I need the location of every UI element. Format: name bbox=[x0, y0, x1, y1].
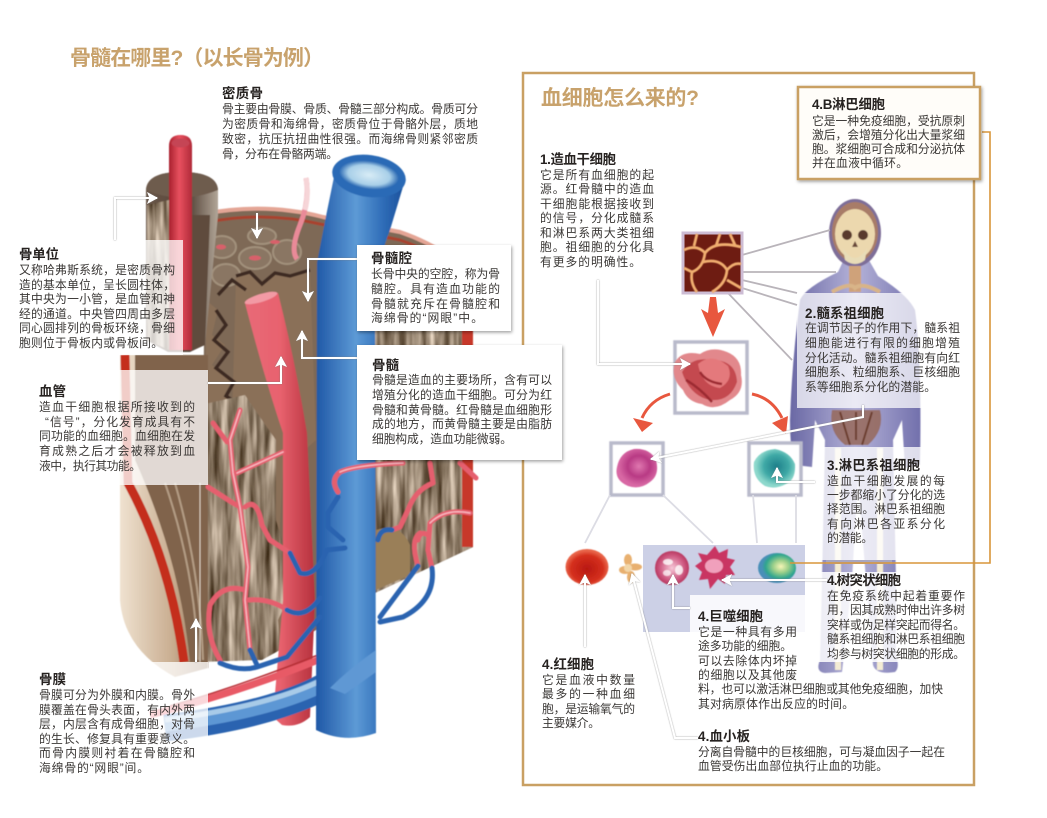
text: platelet bbox=[698, 728, 945, 773]
heading: 密质骨 bbox=[222, 85, 263, 101]
main vein bbox=[316, 177, 405, 738]
panel: periosteum translucent bbox=[37, 662, 208, 774]
arrow: periosteum bbox=[195, 619, 197, 662]
body: 系等细胞系分化的潜能。 bbox=[805, 380, 936, 394]
body: “信号”，分化发育成具有不 bbox=[45, 415, 195, 429]
icon: red blood cell bbox=[566, 549, 608, 585]
icon: hematopoietic stem cell bbox=[674, 349, 742, 407]
frame: myeloid cell bbox=[611, 443, 663, 495]
heading: 4.血小板 bbox=[698, 728, 751, 744]
body: 胞则位于骨板内或骨板间。 bbox=[19, 336, 163, 350]
body: 成的地方，而黄骨髓主要是由脂肪 bbox=[372, 417, 552, 431]
text: red blood cell bbox=[542, 656, 635, 730]
body: 有向淋巴各亚系分化 bbox=[827, 517, 945, 531]
body bbox=[39, 688, 195, 775]
compact bone band at top bbox=[200, 209, 473, 662]
arrow: red blood cell label bbox=[584, 575, 586, 647]
heading: 1.造血干细胞 bbox=[540, 151, 617, 167]
text: osteon bbox=[19, 246, 175, 350]
body: 胞，是运输氧气的 bbox=[542, 702, 635, 716]
body: 同心圆排列的骨板环绕，骨细 bbox=[19, 321, 175, 335]
arrow: blood vessel bbox=[208, 357, 281, 383]
panel: bone marrow bbox=[357, 345, 562, 460]
text: periosteum bbox=[39, 671, 195, 775]
body: 它是一种免疫细胞，受抗原刺 bbox=[812, 114, 965, 128]
small vessels network: blue bbox=[220, 497, 432, 669]
small vessels network: pink bbox=[208, 410, 476, 660]
body: 有更多的明确性。 bbox=[540, 255, 641, 269]
body bbox=[19, 263, 175, 350]
body: 骨髓是造血的主要场所，含有可以 bbox=[372, 373, 552, 387]
body: 造的基本单位，呈长圆柱体， bbox=[19, 278, 175, 292]
body: 它是一种具有多用 bbox=[698, 625, 797, 639]
panel: blood vessel translucent bbox=[37, 370, 208, 485]
text: hematopoietic stem cell bbox=[540, 151, 654, 269]
body: 海绵骨的“网眼”中。 bbox=[371, 311, 483, 325]
text: myeloid progenitor bbox=[805, 305, 960, 394]
body: 干细胞能根据接收到 bbox=[540, 197, 654, 211]
frame: lymphoid cell bbox=[749, 443, 801, 495]
body: 又称哈弗斯系统，是密质骨构 bbox=[19, 263, 175, 277]
body bbox=[698, 625, 943, 711]
vein branch bbox=[165, 664, 352, 728]
frame: stem cell bbox=[675, 342, 747, 413]
small nerve vessel bbox=[294, 178, 307, 259]
arrow: stem cell label bbox=[598, 280, 690, 364]
pelvis bbox=[831, 410, 881, 445]
body: 液中，执行其功能。 bbox=[39, 459, 141, 473]
body bbox=[827, 474, 945, 545]
skull bbox=[829, 199, 881, 267]
bone legs bbox=[838, 448, 880, 670]
icon: dendritic cell bbox=[758, 553, 796, 583]
body: 细胞能进行有限的细胞增殖 bbox=[805, 336, 960, 350]
icon: platelet bbox=[619, 554, 642, 583]
body: 均参与树突状细胞的形成。 bbox=[827, 647, 965, 661]
body: 育成熟之后才会被释放到血 bbox=[39, 444, 195, 458]
right spongy bone bbox=[375, 330, 473, 592]
body: 骨膜可分为外膜和内膜。骨外 bbox=[39, 688, 195, 702]
heading: 骨单位 bbox=[19, 246, 59, 262]
illustration: long bone cross-section bbox=[120, 135, 476, 738]
body: 源。红骨髓中的造血 bbox=[540, 182, 654, 196]
arrow: to lymphoid bbox=[752, 394, 788, 434]
spongy bone bbox=[200, 395, 292, 662]
body: 而骨内膜则衬着在骨髓腔和 bbox=[39, 746, 195, 760]
arrow: dendritic label bbox=[722, 579, 827, 581]
body bbox=[371, 267, 500, 325]
heading: 骨髓腔 bbox=[371, 250, 412, 266]
panel: B lymphocyte bbox=[798, 87, 980, 179]
connector: B lymphocyte orange line bbox=[790, 132, 990, 563]
body: 增殖分化的造血干细胞。可分为红 bbox=[372, 388, 552, 402]
body: 长骨中央的空腔，称为骨 bbox=[371, 267, 500, 281]
body: 其对病原体作出反应的时间。 bbox=[698, 697, 854, 711]
body: 髓系祖细胞和淋巴系祖细胞 bbox=[827, 632, 965, 646]
text: lymphoid progenitor bbox=[827, 457, 945, 545]
body: 同功能的血细胞。血细胞在发 bbox=[39, 429, 195, 443]
frame: blood cell section bbox=[523, 73, 974, 785]
outer bone bbox=[120, 355, 208, 677]
periosteal artery bbox=[150, 660, 318, 715]
body: 海绵骨的“网眼”间。 bbox=[39, 761, 149, 775]
body: 主要媒介。 bbox=[542, 716, 600, 730]
text: dendritic cell bbox=[827, 572, 965, 661]
panel: lavender mature cells background bbox=[643, 545, 805, 632]
central artery in marrow bbox=[245, 293, 315, 726]
body: 料，也可以激活淋巴细胞或其他免疫细胞，加快 bbox=[698, 682, 943, 696]
arrow: macrophage label bbox=[673, 575, 690, 608]
arrow: bone marrow bbox=[302, 331, 357, 358]
body: 在调节因子的作用下，髓系祖 bbox=[805, 321, 960, 335]
body: 的生长、修复具有重要意义。 bbox=[39, 732, 195, 746]
body: 细胞系、粒细胞系、巨核细胞 bbox=[805, 365, 960, 379]
body: 胞。祖细胞的分化具 bbox=[540, 240, 654, 254]
body: 最多的一种血细 bbox=[542, 687, 635, 701]
heading: 4.树突状细胞 bbox=[827, 572, 902, 588]
body: 造血干细胞发展的每 bbox=[827, 474, 945, 488]
illustration: human skeleton body bbox=[790, 199, 920, 673]
body: 胞。浆细胞可合成和分泌抗体 bbox=[812, 142, 965, 156]
overlay: body translucent panels bbox=[797, 293, 970, 662]
heading: 4.红细胞 bbox=[542, 656, 595, 672]
body: 层，内层含有成骨细胞，对骨 bbox=[39, 717, 195, 731]
body: 经的通道。中央管四周由多层 bbox=[19, 307, 175, 321]
body bbox=[372, 373, 552, 446]
text: compact bone bbox=[222, 85, 478, 161]
body: 可以去除体内坏掉 bbox=[698, 654, 797, 668]
lines: marrow to skeleton bbox=[727, 230, 836, 360]
panel: macrophage white overlay bbox=[690, 595, 805, 635]
heading: 血管 bbox=[39, 383, 66, 399]
osteon central artery bbox=[169, 135, 192, 350]
neck and clavicle bbox=[849, 266, 861, 292]
body: 激后，会增殖分化出大量浆细 bbox=[812, 128, 965, 142]
icon: macrophage bbox=[695, 546, 735, 589]
title: where is bone marrow: 骨髓在哪里?（以长骨为例） bbox=[70, 47, 324, 70]
body: 的潜能。 bbox=[827, 531, 873, 545]
panel: osteon translucent bbox=[17, 240, 183, 355]
body: 在免疫系统中起着重要作 bbox=[827, 589, 965, 603]
icon: granulocyte bbox=[655, 551, 689, 585]
icon: bone marrow tissue square bbox=[683, 233, 742, 293]
body: 膜覆盖在骨头表面，有内外两 bbox=[39, 703, 195, 717]
icon: lymphoid progenitor bbox=[754, 449, 795, 488]
body: 分化活动。髓系祖细胞有向红 bbox=[805, 351, 960, 365]
marrow cavity bbox=[205, 270, 316, 660]
arrow: to myeloid bbox=[633, 394, 670, 432]
panel: medullary cavity bbox=[357, 245, 511, 331]
body bbox=[540, 168, 654, 269]
body: 突样或伪足样突起而得名。 bbox=[827, 618, 965, 632]
body: 它是血液中数量 bbox=[542, 673, 635, 687]
arrow: marrow to stem cell bbox=[701, 297, 725, 337]
body: 并在血液中循环。 bbox=[812, 156, 908, 170]
body: 的细胞以及其他废 bbox=[698, 668, 797, 682]
body: 用，因其成熟时伸出许多树 bbox=[827, 603, 965, 617]
osteon cylinder bbox=[146, 172, 218, 352]
body bbox=[698, 745, 945, 773]
arrow: osteon bbox=[115, 198, 157, 240]
arrow: medullary cavity bbox=[308, 259, 357, 301]
text: macrophage bbox=[698, 608, 943, 711]
arrow: compact bone bbox=[256, 213, 258, 238]
body: 细胞构成，造血功能微弱。 bbox=[372, 432, 512, 446]
body: 髓腔。具有造血功能的 bbox=[371, 282, 500, 296]
body: 和淋巴系两大类祖细 bbox=[540, 226, 654, 240]
body: 骨主要由骨膜、骨质、骨髓三部分构成。骨质可分 bbox=[222, 102, 478, 116]
body: 的信号，分化成髓系 bbox=[540, 211, 654, 225]
body silhouette bbox=[790, 255, 920, 673]
heading: 4.B淋巴细胞 bbox=[812, 96, 886, 112]
arrows: cell diagram bbox=[585, 280, 863, 738]
body: 骨髓就充斥在骨髓腔和 bbox=[371, 297, 500, 311]
heading: 骨膜 bbox=[39, 671, 66, 687]
icon: myeloid progenitor bbox=[616, 449, 657, 487]
body: 致密，抗压抗扭曲性很强。而海绵骨则紧邻密质 bbox=[222, 132, 478, 146]
body: 分离自骨髓中的巨核细胞，可与凝血因子一起在 bbox=[698, 745, 945, 759]
body bbox=[827, 589, 965, 661]
text: bone marrow bbox=[372, 357, 552, 446]
text: B lymphocyte bbox=[812, 96, 965, 170]
arrow: platelet label bbox=[632, 574, 698, 738]
body bbox=[39, 400, 195, 473]
body bbox=[805, 321, 960, 394]
body: 为密质骨和海绵骨，密质骨位于骨骼外层，质地 bbox=[222, 117, 478, 131]
body: 其中央为一小管，是血管和神 bbox=[19, 292, 175, 306]
body: 择范围。淋巴系祖细胞 bbox=[827, 502, 945, 516]
body bbox=[542, 673, 635, 730]
arrows on bone illustration bbox=[115, 198, 357, 662]
body: 血管受伤出血部位执行止血的功能。 bbox=[698, 759, 888, 773]
body: 它是所有血细胞的起 bbox=[540, 168, 654, 182]
haversian rings bbox=[208, 228, 301, 286]
body: 造血干细胞根据所接收到的 bbox=[39, 400, 195, 414]
heading: 骨髓 bbox=[372, 357, 400, 373]
heading: 2.髓系祖细胞 bbox=[805, 305, 885, 321]
heading: 3.淋巴系祖细胞 bbox=[827, 457, 921, 473]
body: 骨，分布在骨骼两端。 bbox=[222, 147, 338, 161]
body bbox=[222, 102, 478, 161]
body: 一步都缩小了分化的选 bbox=[827, 488, 945, 502]
heading: 4.巨噬细胞 bbox=[698, 608, 764, 624]
text: medullary cavity bbox=[371, 250, 500, 325]
body bbox=[812, 114, 965, 170]
arrow: lymphoid label bbox=[777, 468, 815, 482]
body: 途多功能的细胞。 bbox=[698, 639, 792, 653]
text: blood vessel bbox=[39, 383, 195, 473]
body: 骨髓和黄骨髓。红骨髓是血细胞形 bbox=[372, 403, 552, 417]
lines: progenitors to mature cells bbox=[585, 495, 796, 543]
heading: blood cell section: 血细胞怎么来的? bbox=[541, 87, 699, 110]
arrow: myeloid label bbox=[651, 405, 863, 459]
